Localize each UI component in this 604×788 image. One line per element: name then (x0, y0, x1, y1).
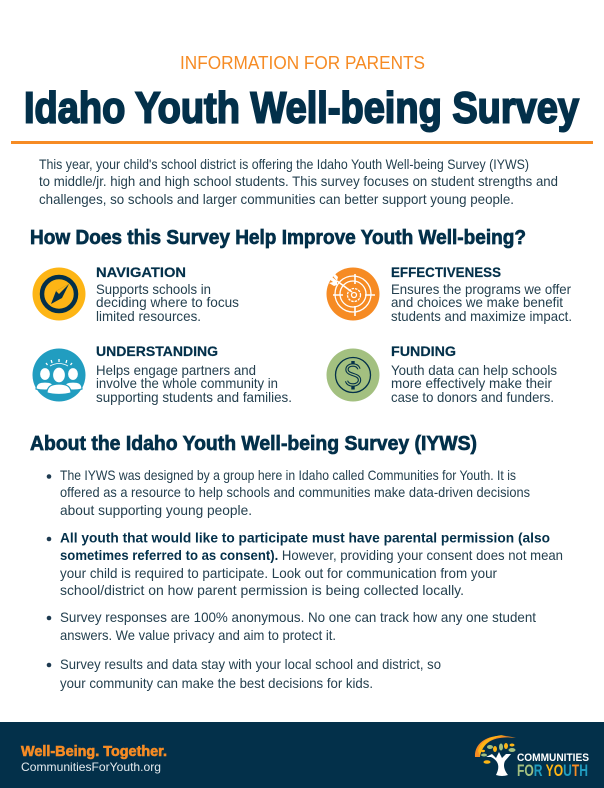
bullet: designed by (47, 468, 530, 518)
orange divider (11, 141, 593, 144)
text: funding: more effectively make their (391, 376, 552, 391)
intro paragraph: to middle/jr. high and high school students. This survey focuses on student strengths and (39, 174, 558, 189)
logo icon: tree and arc (475, 735, 516, 776)
text: funding (391, 363, 557, 405)
text: funding: case to donors and funders. (391, 390, 554, 405)
section heading: how: How Does this Survey Help Improve Youth Well-being? (30, 227, 526, 249)
text: understanding: supporting students and families. (96, 390, 292, 405)
heading: understanding: UNDERSTANDING (96, 344, 218, 359)
icon: compass (32, 268, 86, 320)
text: funding: Youth data can help schools (391, 363, 557, 378)
text: effectiveness: students and maximize impact. (391, 309, 572, 324)
bullet: parental permission: sometimes referred to as consent). However, providing your consent does not mean (60, 548, 563, 563)
panel: funding (326, 344, 557, 405)
bullet: anonymous: Survey responses are 100% anonymous. No one can track how any one student (60, 610, 536, 625)
logo text: communities: COMMUNITIES (517, 752, 589, 764)
footer url: CommunitiesForYouth.org (21, 760, 161, 774)
intro paragraph (39, 157, 558, 207)
heading: funding: FUNDING (391, 344, 456, 359)
bullet: parental permission: All youth that would like to participate must have parental permission (also (60, 530, 550, 546)
text: navigation: limited resources. (96, 309, 201, 324)
logo: communities for youth (475, 735, 589, 780)
bullet: anonymous: answers. We value privacy and aim to protect it. (60, 628, 336, 643)
panel: understanding (32, 344, 292, 405)
bullet: results: Survey results and data stay with your local school and district, so (60, 657, 441, 672)
text: understanding: Helps engage partners and (96, 363, 256, 378)
panel: effectiveness (326, 265, 572, 324)
icon: dollar (326, 348, 380, 402)
bullet: anonymous (47, 610, 536, 643)
intro paragraph: challenges, so schools and larger communities can better support young people. (39, 192, 514, 207)
bullet: parental permission: school/district on how parent permission is being collected locally. (60, 583, 464, 598)
text: effectiveness: Ensures the programs we offer (391, 282, 571, 297)
text: effectiveness (391, 282, 572, 324)
text: navigation: deciding where to focus (96, 295, 239, 310)
subtitle: INFORMATION FOR PARENTS (180, 52, 425, 73)
bullet: designed by: offered as a resource to help schools and communities make data-driven decisions (60, 485, 530, 500)
heading: navigation: NAVIGATION (96, 265, 186, 280)
bullet: results: your community can make the best decisions for kids. (60, 676, 373, 691)
section heading: about: About the Idaho Youth Well-being Survey (IYWS) (30, 433, 477, 455)
icon: people (32, 348, 86, 402)
bullet: parental permission (47, 530, 563, 598)
icon: target (326, 268, 380, 320)
footer band (0, 722, 604, 788)
bullet: parental permission: your child is required to participate. Look out for communication from your (60, 566, 497, 581)
panel: navigation (32, 265, 239, 324)
bullet: results (47, 657, 441, 691)
bullet: designed by: about supporting young people. (60, 503, 252, 518)
text: navigation (96, 282, 239, 324)
bullet list (47, 468, 563, 691)
heading: effectiveness: EFFECTIVENESS (391, 265, 501, 280)
text: understanding: involve the whole community in (96, 376, 278, 391)
intro paragraph: This year, your child's school district is offering the Idaho Youth Well-being Survey (IYWS) (39, 157, 529, 172)
text: understanding (96, 363, 292, 405)
text: navigation: Supports schools in (96, 282, 211, 297)
text: effectiveness: and choices we make benefit (391, 295, 563, 310)
bullet: designed by: The IYWS was designed by a group here in Idaho called Communities for Youth. It is (60, 468, 516, 483)
footer tagline: Well-Being. Together. (21, 744, 167, 760)
logo text: for youth: FOR YOUTH (517, 761, 588, 780)
